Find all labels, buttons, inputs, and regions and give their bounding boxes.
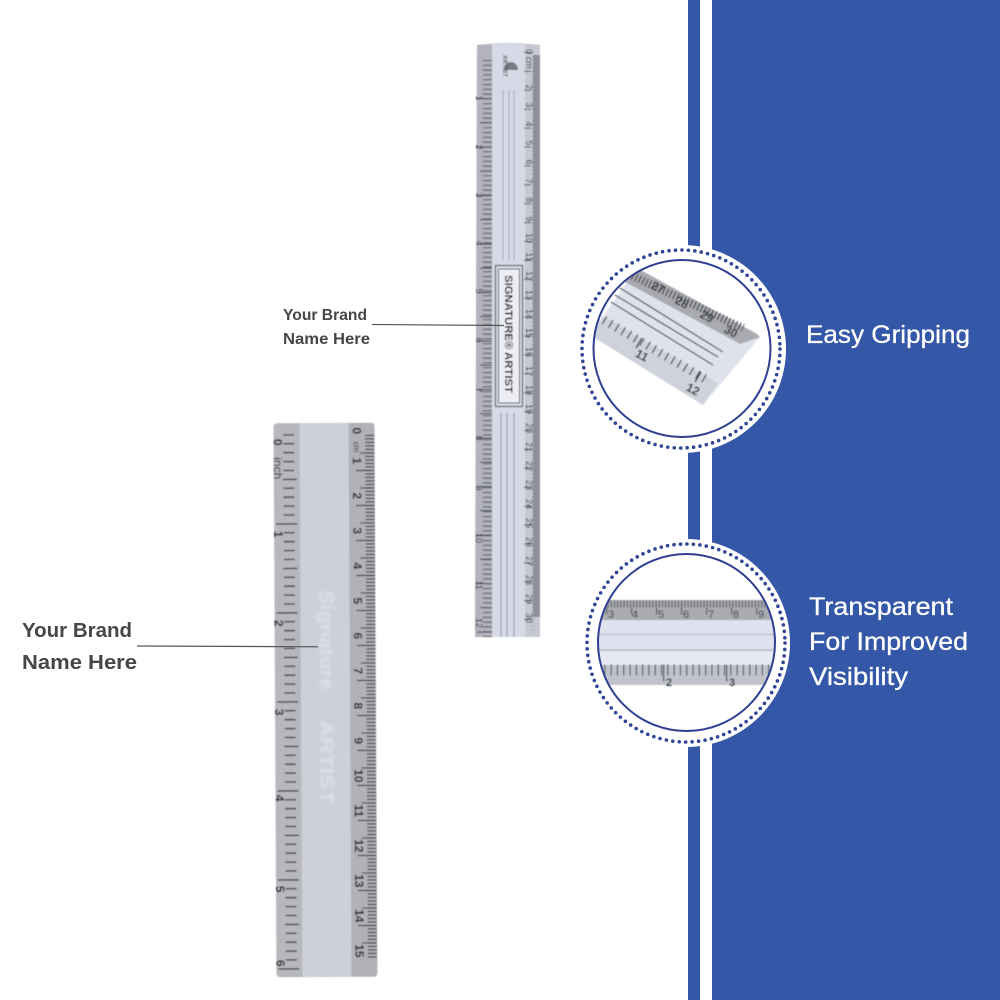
logo: ARTIST — [501, 55, 507, 77]
brand badge — [496, 266, 522, 406]
scale numbers: 3 — [608, 609, 614, 621]
callout: tall ruler brand name: Your Brand — [283, 307, 367, 324]
scale numbers: 4 — [632, 609, 638, 621]
cm numbers: 5 — [524, 140, 534, 146]
cm numbers: 1 — [350, 457, 364, 465]
cm numbers: 18 — [524, 385, 534, 395]
scale numbers: 9 — [758, 609, 764, 621]
cm numbers: 30 — [524, 613, 534, 623]
cm numbers: 10 — [524, 233, 534, 243]
callout: tall ruler brand name — [283, 307, 504, 348]
inch numbers: 3 — [474, 192, 484, 198]
short wide ruler — [271, 423, 377, 977]
cm numbers: 13 — [524, 290, 534, 300]
cm numbers: 10 — [351, 769, 365, 783]
scale numbers: 3 — [729, 677, 735, 689]
circle: easy gripping detail — [578, 245, 786, 453]
inch numbers — [271, 439, 287, 967]
cm numbers: cm — [352, 441, 361, 453]
embossed brand text — [314, 590, 338, 804]
scale numbers — [633, 278, 740, 399]
scale numbers: 11 — [633, 346, 651, 365]
inch numbers: 0 — [271, 439, 285, 446]
logo — [501, 55, 518, 77]
cm numbers: 23 — [524, 480, 534, 490]
inch numbers: 2 — [474, 144, 484, 150]
cm numbers: 7 — [351, 667, 365, 675]
callout: short ruler brand name — [22, 620, 318, 674]
cm numbers: 7 — [524, 178, 534, 184]
cm numbers: 4 — [350, 562, 364, 570]
inch numbers: 9 — [474, 485, 484, 491]
cm numbers: 12 — [524, 271, 534, 281]
cm numbers: 11 — [524, 252, 534, 262]
cm ticks — [365, 435, 372, 960]
label: transparent for improved visibility — [809, 593, 968, 691]
cm numbers: 13 — [352, 874, 366, 888]
label: transparent for improved visibility: Visibility — [809, 663, 909, 691]
scale numbers: 6 — [683, 609, 689, 621]
inch ticks — [484, 60, 488, 637]
cm numbers: 22 — [524, 461, 534, 471]
inch numbers: 2 — [272, 620, 286, 627]
cm numbers: 9 — [524, 216, 534, 222]
cm numbers: 14 — [352, 909, 366, 923]
scale numbers: 28 — [673, 293, 691, 312]
scale numbers — [608, 609, 764, 689]
inch numbers: 4 — [474, 240, 484, 246]
inch numbers: 6 — [273, 960, 287, 967]
inch numbers: 6 — [474, 337, 484, 343]
scale numbers: 29 — [698, 307, 716, 326]
cm numbers: 16 — [524, 347, 534, 357]
center grooves — [501, 90, 514, 637]
tall ruler — [474, 43, 540, 637]
cm numbers: 21 — [524, 442, 534, 452]
cm numbers: 25 — [524, 518, 534, 528]
straight ruler close-up — [598, 600, 776, 689]
blue background panel — [688, 0, 1000, 1000]
cm numbers: 11 — [352, 804, 366, 818]
cm ticks — [528, 52, 533, 630]
cm numbers: 2 — [350, 492, 364, 500]
label: transparent for improved visibility: Transparent — [809, 593, 953, 621]
cm numbers: 29 — [524, 594, 534, 604]
inch numbers: 12 — [474, 618, 484, 628]
circle: transparency detail — [582, 539, 790, 747]
angled ruler close-up — [590, 268, 760, 405]
scale numbers: 2 — [666, 677, 672, 689]
brand badge: SIGNATURE® ARTIST — [502, 275, 514, 393]
inch numbers: 4 — [272, 795, 287, 802]
scale numbers: 8 — [733, 609, 739, 621]
cm numbers: 24 — [524, 499, 534, 509]
cm numbers: 0 cm — [524, 49, 534, 69]
inch numbers: 5 — [273, 886, 287, 893]
inch numbers: 7 — [474, 387, 484, 393]
scale numbers: 12 — [684, 380, 702, 399]
inch numbers — [474, 95, 484, 628]
inch numbers: inch — [271, 457, 285, 479]
cm numbers: 8 — [524, 197, 534, 203]
callout: tall ruler brand name: Name Here — [283, 331, 370, 348]
inch numbers: 5 — [474, 288, 484, 294]
cm numbers: 15 — [524, 328, 534, 338]
scale numbers: 27 — [649, 278, 667, 297]
cm numbers: 3 — [524, 102, 534, 108]
cm numbers: 6 — [351, 632, 365, 640]
inch numbers: 8 — [474, 435, 484, 441]
embossed brand text: ARTIST — [316, 720, 337, 804]
inch ticks — [286, 434, 292, 972]
scale numbers: 5 — [658, 609, 664, 621]
cm numbers: 27 — [524, 556, 534, 566]
inch numbers: 3 — [272, 709, 286, 716]
cm numbers: 12 — [352, 839, 366, 853]
cm numbers: 17 — [524, 366, 534, 376]
embossed brand text: Signature — [314, 590, 337, 690]
cm numbers: 15 — [352, 944, 366, 958]
cm numbers: 2 — [524, 84, 534, 90]
cm numbers: 9 — [351, 737, 365, 745]
callout: short ruler brand name: Your Brand — [22, 620, 132, 642]
cm numbers: 8 — [351, 702, 365, 710]
cm numbers: 20 — [524, 423, 534, 433]
cm numbers: 28 — [524, 575, 534, 585]
cm numbers: 3 — [350, 527, 364, 535]
inch numbers: 1 — [271, 531, 285, 538]
cm numbers: 6 — [524, 159, 534, 165]
cm numbers — [350, 427, 366, 958]
inch numbers: 10 — [474, 533, 484, 543]
scale numbers: 7 — [708, 609, 714, 621]
label: transparent for improved visibility: For Improved — [809, 628, 968, 656]
cm numbers: 14 — [524, 309, 534, 319]
cm numbers: 26 — [524, 537, 534, 547]
scale numbers: 30 — [722, 322, 740, 341]
cm numbers: 4 — [524, 121, 534, 127]
callout: short ruler brand name: Name Here — [22, 652, 137, 674]
cm numbers: 19 — [524, 404, 534, 414]
cm numbers: 0 — [350, 427, 364, 435]
label: easy gripping: Easy Gripping — [806, 321, 970, 349]
inch numbers: 1 — [474, 95, 484, 101]
cm numbers — [524, 49, 534, 623]
inch numbers: 11 — [474, 580, 484, 590]
cm numbers: 5 — [350, 597, 365, 605]
